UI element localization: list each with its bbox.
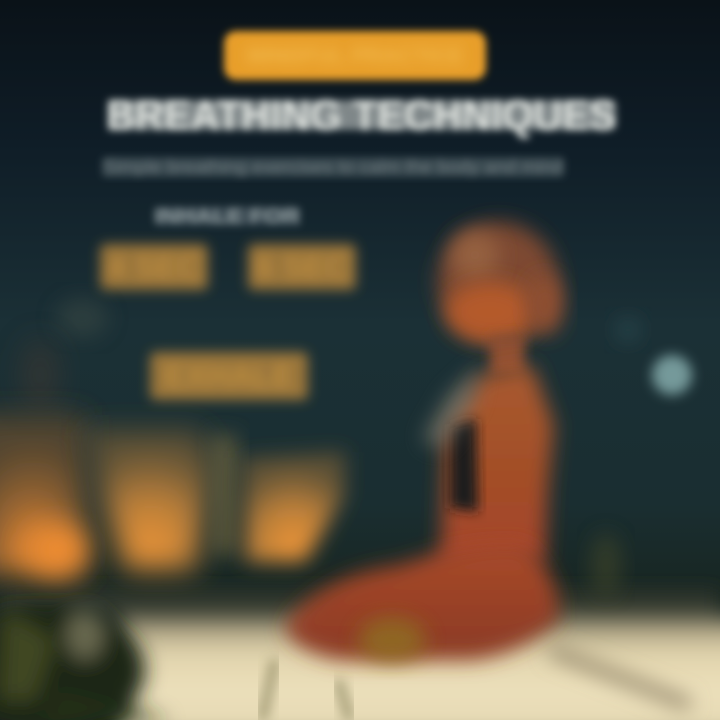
badge: MINDFUL PRACTICE <box>246 43 464 68</box>
foot stroke <box>550 650 690 705</box>
flame glow panel <box>0 415 345 576</box>
floor glow <box>0 592 720 720</box>
badge <box>224 31 486 80</box>
small heading: INHALE FOR <box>154 205 300 228</box>
panel: timing box left: 4 SEC <box>108 249 200 285</box>
neck <box>490 335 524 375</box>
legs <box>285 544 558 660</box>
panel: timing box left <box>100 244 208 290</box>
figure: meditating woman <box>285 222 690 705</box>
panel: centre label: EXHALE <box>164 358 294 394</box>
plant stems foreground <box>262 660 350 720</box>
hair <box>438 222 558 342</box>
panel: centre label <box>150 352 308 400</box>
arm highlight <box>422 365 480 448</box>
garment <box>450 418 478 512</box>
faint mark upper left <box>20 298 108 411</box>
plant right <box>590 533 622 597</box>
panel: timing box right: 6 SEC <box>256 249 348 285</box>
panel: timing box right <box>248 244 356 290</box>
title: BREATHING TECHNIQUES <box>106 91 616 140</box>
torso <box>440 365 554 570</box>
plants bottom left <box>0 605 170 720</box>
breath orb <box>615 317 692 395</box>
subtitle: Simple breathing exercises to calm the body and mind <box>103 157 563 177</box>
